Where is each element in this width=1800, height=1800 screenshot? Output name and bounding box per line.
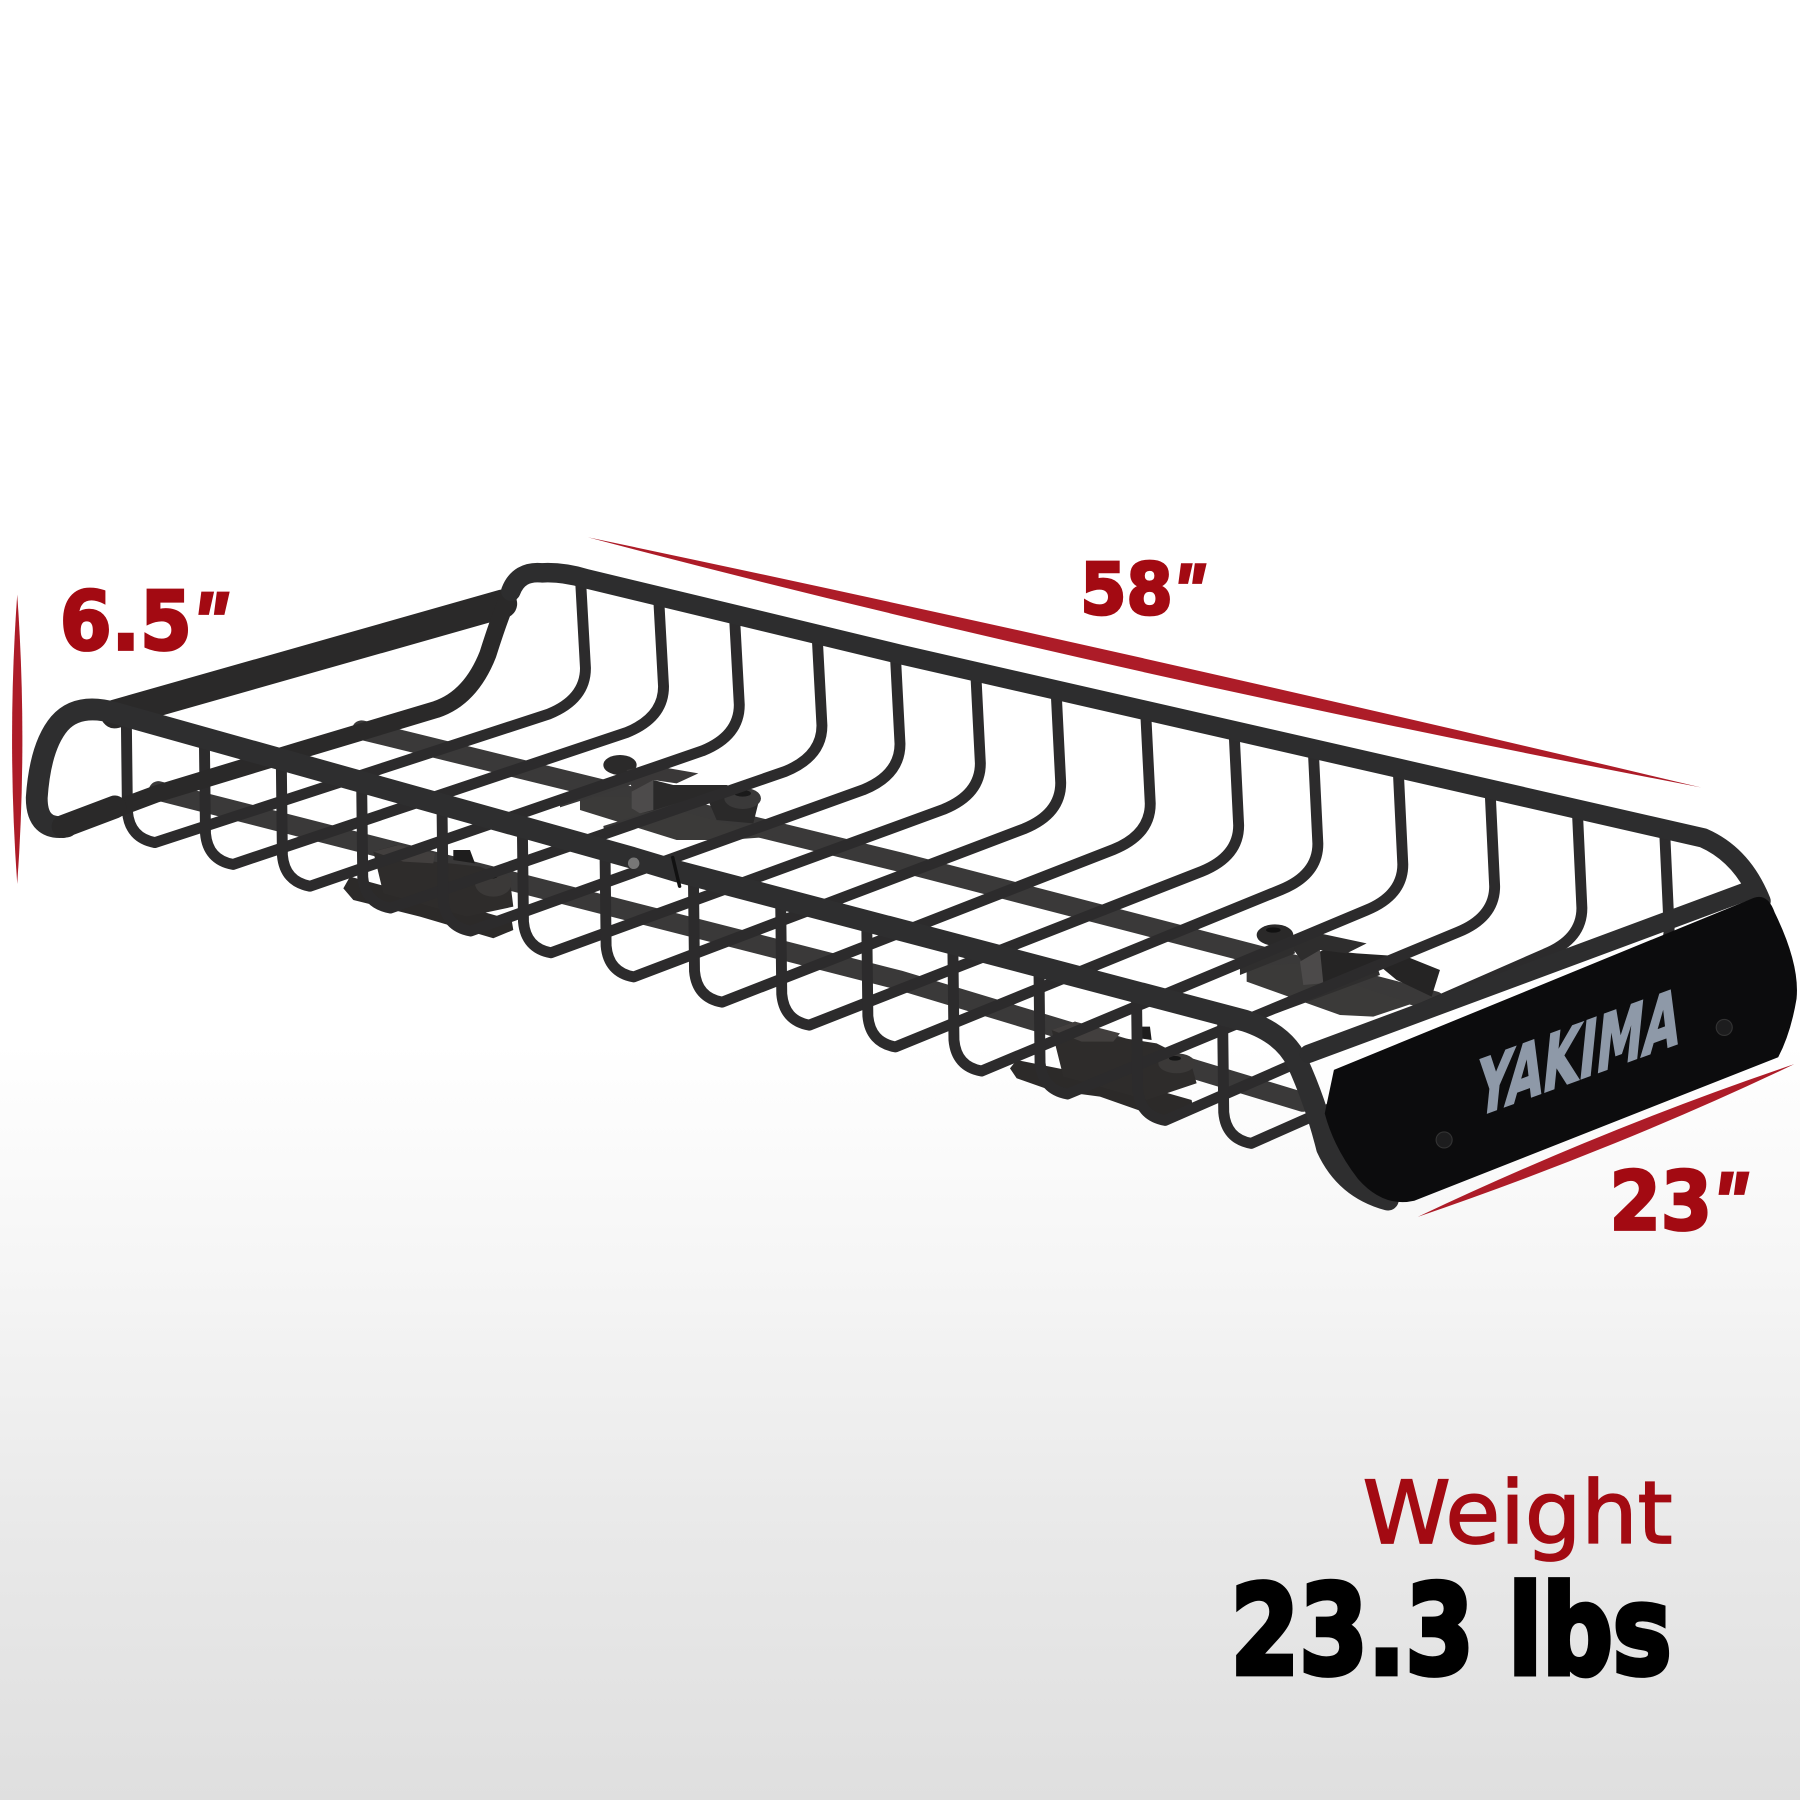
left end loop lower tube xyxy=(63,591,511,829)
clamp: near left xyxy=(343,845,513,938)
dimension label: width: 23" xyxy=(1609,1154,1748,1249)
back left tube xyxy=(115,604,503,714)
clamp: near right xyxy=(1010,1022,1197,1117)
plate screw right xyxy=(1716,1019,1732,1035)
plate screw left xyxy=(1436,1132,1452,1148)
far long rail xyxy=(511,573,1761,901)
end plate xyxy=(1325,897,1797,1202)
rail joint xyxy=(628,858,680,886)
dimension label: length: 58" xyxy=(1080,548,1205,631)
dimension line: length xyxy=(588,537,1701,788)
clamp: far left xyxy=(560,755,773,840)
left loop thick lower corner xyxy=(63,807,115,827)
near long rail with end loop xyxy=(37,709,1388,1200)
weight label: Weight xyxy=(1363,1464,1673,1564)
dimension line: height xyxy=(12,595,22,884)
dimension label: height: 6.5" xyxy=(60,575,229,670)
product: roof basket xyxy=(37,573,1797,1202)
clamp: far right xyxy=(1240,924,1440,1017)
wire hoops xyxy=(126,585,1669,1143)
plate logo: YAKIMA xyxy=(1473,970,1685,1136)
dimension line: width xyxy=(1418,1064,1794,1217)
right cross tube xyxy=(1309,889,1754,1054)
weight value: 23.3 lbs xyxy=(1231,1560,1671,1703)
lower frame tubes xyxy=(158,730,1435,1102)
